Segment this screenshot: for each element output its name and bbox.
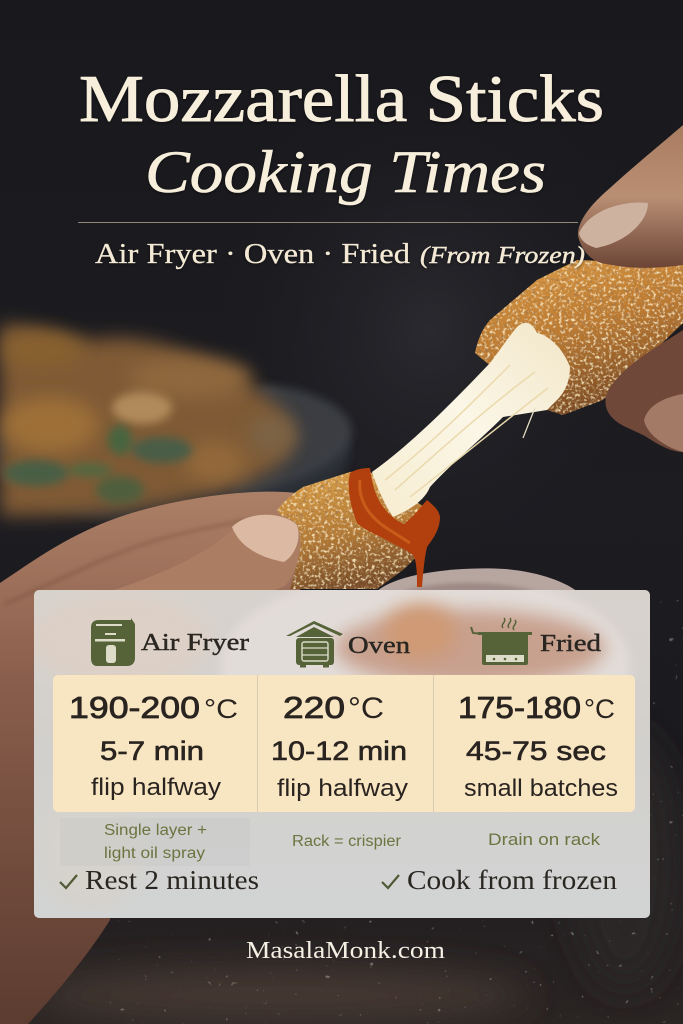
blurred plate of mozzarella sticks	[0, 325, 352, 524]
subtitle	[95, 238, 585, 270]
column: oven settings: flip halfway	[277, 775, 408, 802]
column: fried settings: 45-75 sec	[466, 736, 606, 766]
tip: cook from frozen	[381, 870, 617, 890]
column: oven settings: 10-12 min	[271, 736, 407, 766]
tip: rest 2 minutes	[59, 871, 258, 890]
label: Fried: Fried	[540, 631, 601, 657]
method notes: Rack = crispier	[292, 833, 401, 850]
column: oven settings: °C	[348, 692, 384, 725]
method notes: Single layer +	[104, 822, 207, 839]
title	[79, 62, 604, 205]
stretched melted cheese	[372, 323, 570, 517]
left thumb over stick	[108, 514, 300, 592]
column: air fryer settings: flip halfway	[91, 774, 221, 801]
label: Oven: Oven	[348, 633, 410, 659]
lower mozzarella stick piece	[277, 468, 440, 589]
method notes: light oil spray	[104, 845, 205, 862]
icon: oven	[286, 621, 343, 668]
column: air fryer settings: 190-200	[69, 690, 200, 725]
label: Air Fryer: Air Fryer	[141, 630, 249, 656]
tomato sauce coating	[349, 468, 440, 587]
title divider	[78, 222, 578, 223]
column: oven settings	[271, 690, 408, 802]
website credit: MasalaMonk.com	[246, 938, 445, 964]
tip: cook from frozen: Cook from frozen	[407, 865, 618, 895]
column: air fryer settings	[69, 690, 238, 801]
stone table surface	[30, 600, 683, 1024]
column: fried settings: °C	[584, 694, 615, 724]
blurred basil herb	[4, 425, 192, 504]
column: fried settings	[460, 696, 618, 796]
right hand fingers	[578, 125, 683, 452]
timing table	[53, 675, 635, 812]
column: oven settings: 220	[283, 690, 345, 725]
subtitle: Air Fryer · Oven · Fried	[95, 238, 411, 270]
frosted backdrop	[30, 570, 650, 918]
column: air fryer settings: °C	[204, 694, 238, 724]
icon: frying pot	[471, 618, 532, 665]
title: Mozzarella Sticks	[79, 62, 604, 136]
column: air fryer settings: 5-7 min	[100, 736, 204, 766]
column: fried settings: 175-180	[458, 690, 581, 725]
tip: rest 2 minutes: Rest 2 minutes	[85, 865, 259, 895]
cooking method header row	[91, 618, 601, 668]
title: Cooking Times	[145, 139, 546, 205]
left hand holding stick	[0, 492, 304, 1024]
column: fried settings: small batches	[464, 775, 618, 802]
dipping sauce bowl rim	[376, 568, 578, 592]
thumbnail	[232, 515, 299, 562]
icon: air fryer	[91, 618, 135, 666]
frosted info panel	[30, 570, 650, 918]
method notes	[104, 822, 601, 862]
upper mozzarella stick piece	[475, 260, 683, 415]
method notes: Drain on rack	[488, 831, 601, 849]
subtitle: (From Frozen)	[420, 243, 585, 269]
